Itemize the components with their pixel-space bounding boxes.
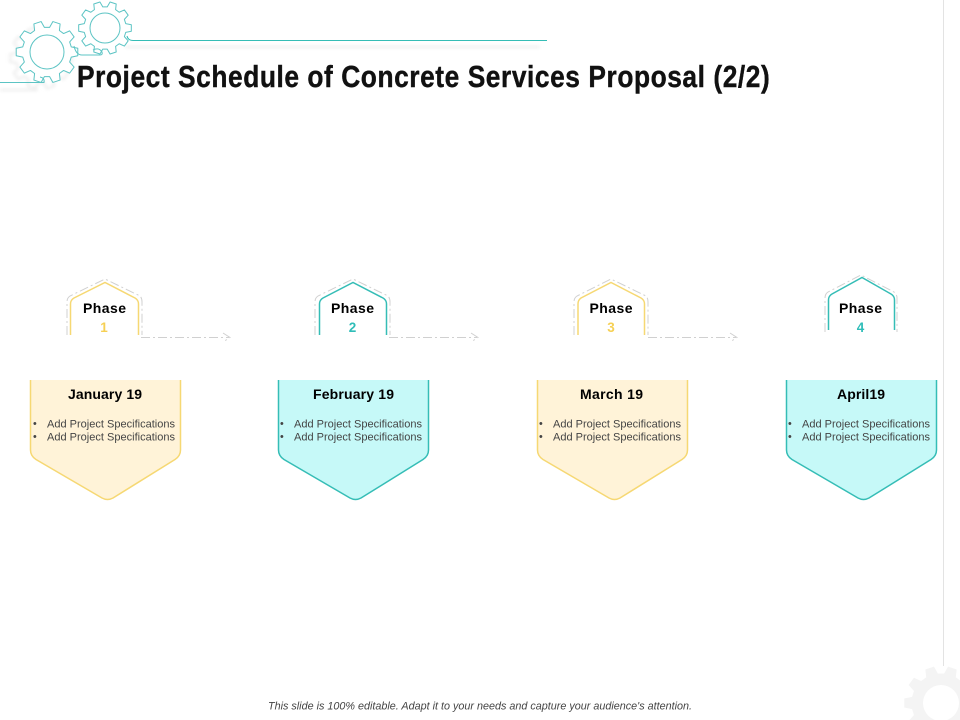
phase 1 marker: Phase	[83, 300, 126, 316]
footer note: This slide is 100% editable. Adapt it to your needs and capture your audience's attention.	[268, 700, 692, 712]
card: March 19: •	[539, 431, 543, 443]
card: February 19: •	[280, 418, 284, 430]
phase 3 marker	[574, 279, 648, 335]
card: March 19: Add Project Specifications	[553, 432, 681, 444]
card: January 19	[30, 380, 180, 500]
card: April19: Add Project Specifications	[802, 418, 930, 430]
phase 4 marker: Phase	[839, 300, 882, 316]
card: March 19: •	[539, 418, 543, 430]
card: April19: April19	[837, 386, 885, 402]
phase 4 marker	[825, 275, 897, 335]
card: April19	[786, 380, 936, 500]
phase 2 marker: 2	[349, 320, 356, 335]
card: January 19: January 19	[68, 386, 142, 402]
card: March 19	[538, 380, 688, 500]
card: April19: Add Project Specifications	[802, 432, 930, 444]
card: March 19: March 19	[580, 386, 643, 402]
phase 2 marker	[315, 279, 390, 335]
card: January 19: •	[33, 418, 37, 430]
phase 3 marker: Phase	[590, 300, 633, 316]
card: February 19: Add Project Specifications	[294, 432, 422, 444]
card: January 19: Add Project Specifications	[47, 432, 175, 444]
card: April19: •	[788, 418, 792, 430]
card: February 19: Add Project Specifications	[294, 418, 422, 430]
card: February 19: •	[280, 431, 284, 443]
phase 4 marker: 4	[857, 320, 865, 335]
phase 2 marker: Phase	[331, 300, 374, 316]
card: March 19: Add Project Specifications	[553, 418, 681, 430]
arrow: phase 3 to 4	[648, 333, 737, 342]
phase 3 marker: 3	[607, 320, 615, 335]
phase 1 marker: 1	[100, 320, 108, 335]
arrow: phase 1 to 2	[141, 333, 230, 342]
icon: faded corner gear	[904, 667, 960, 720]
phase 1 marker	[67, 279, 142, 335]
card: January 19: Add Project Specifications	[47, 418, 175, 430]
arrow: phase 2 to 3	[389, 333, 478, 342]
icon: header gears and rule	[0, 2, 547, 90]
card: February 19	[278, 380, 428, 500]
card: April19: •	[788, 431, 792, 443]
card: February 19: February 19	[313, 386, 394, 402]
title: Project Schedule of Concrete Services Proposal (2/2)	[77, 60, 770, 95]
right margin line	[942, 0, 944, 666]
card: January 19: •	[33, 431, 37, 443]
